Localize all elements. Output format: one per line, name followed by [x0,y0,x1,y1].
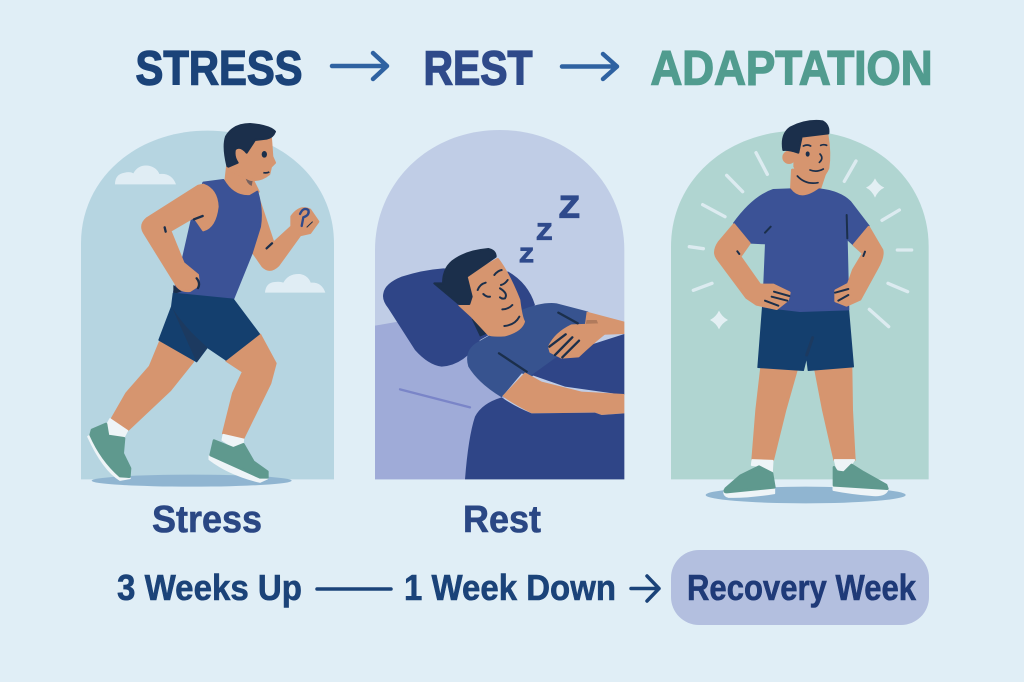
runner figure [88,124,318,482]
label: Stress: Stress [152,499,262,541]
panel: adapted standing person [671,121,929,503]
pill: Recovery Week: Recovery Week [687,567,917,608]
arch background [375,130,624,479]
panel: sleeping rest [375,130,624,479]
icon: sleep z letters: Z [520,245,533,267]
standing figure [715,121,888,497]
icon: sparkle upper right [866,178,884,198]
panel: runner under stress [81,124,334,487]
ground shadow [706,487,906,503]
arrow: rest to adaptation [562,54,617,79]
bed sheet [375,317,505,479]
pill: Recovery Week [671,550,929,625]
icon: sleep z letters: Z [537,218,552,244]
label: Rest: Rest [463,499,541,541]
arrow: stress to rest [332,53,387,79]
icon: cloud right [265,274,325,293]
schedule text: 3 Weeks Up: 3 Weeks Up [117,567,302,608]
heading: REST: REST [424,42,532,96]
heading: STRESS: STRESS [136,42,302,96]
connector line [317,587,391,591]
pillow [383,268,535,367]
radiating rays [689,153,912,327]
icon: sleep z letters [520,189,580,267]
sheet crease [400,389,470,407]
icon: sparkle lower left [710,311,728,329]
arrow: to recovery week [631,576,659,601]
ground shadow [92,475,292,487]
arch background [81,131,334,479]
sleeping person [434,249,624,479]
arch background [671,131,929,479]
icon: cloud left [115,165,176,184]
title row: stress, rest, adaptation [136,42,932,96]
heading: ADAPTATION: ADAPTATION [650,42,932,96]
schedule text: 1 Week Down: 1 Week Down [404,567,616,608]
icon: sleep z letters: Z [559,189,580,224]
